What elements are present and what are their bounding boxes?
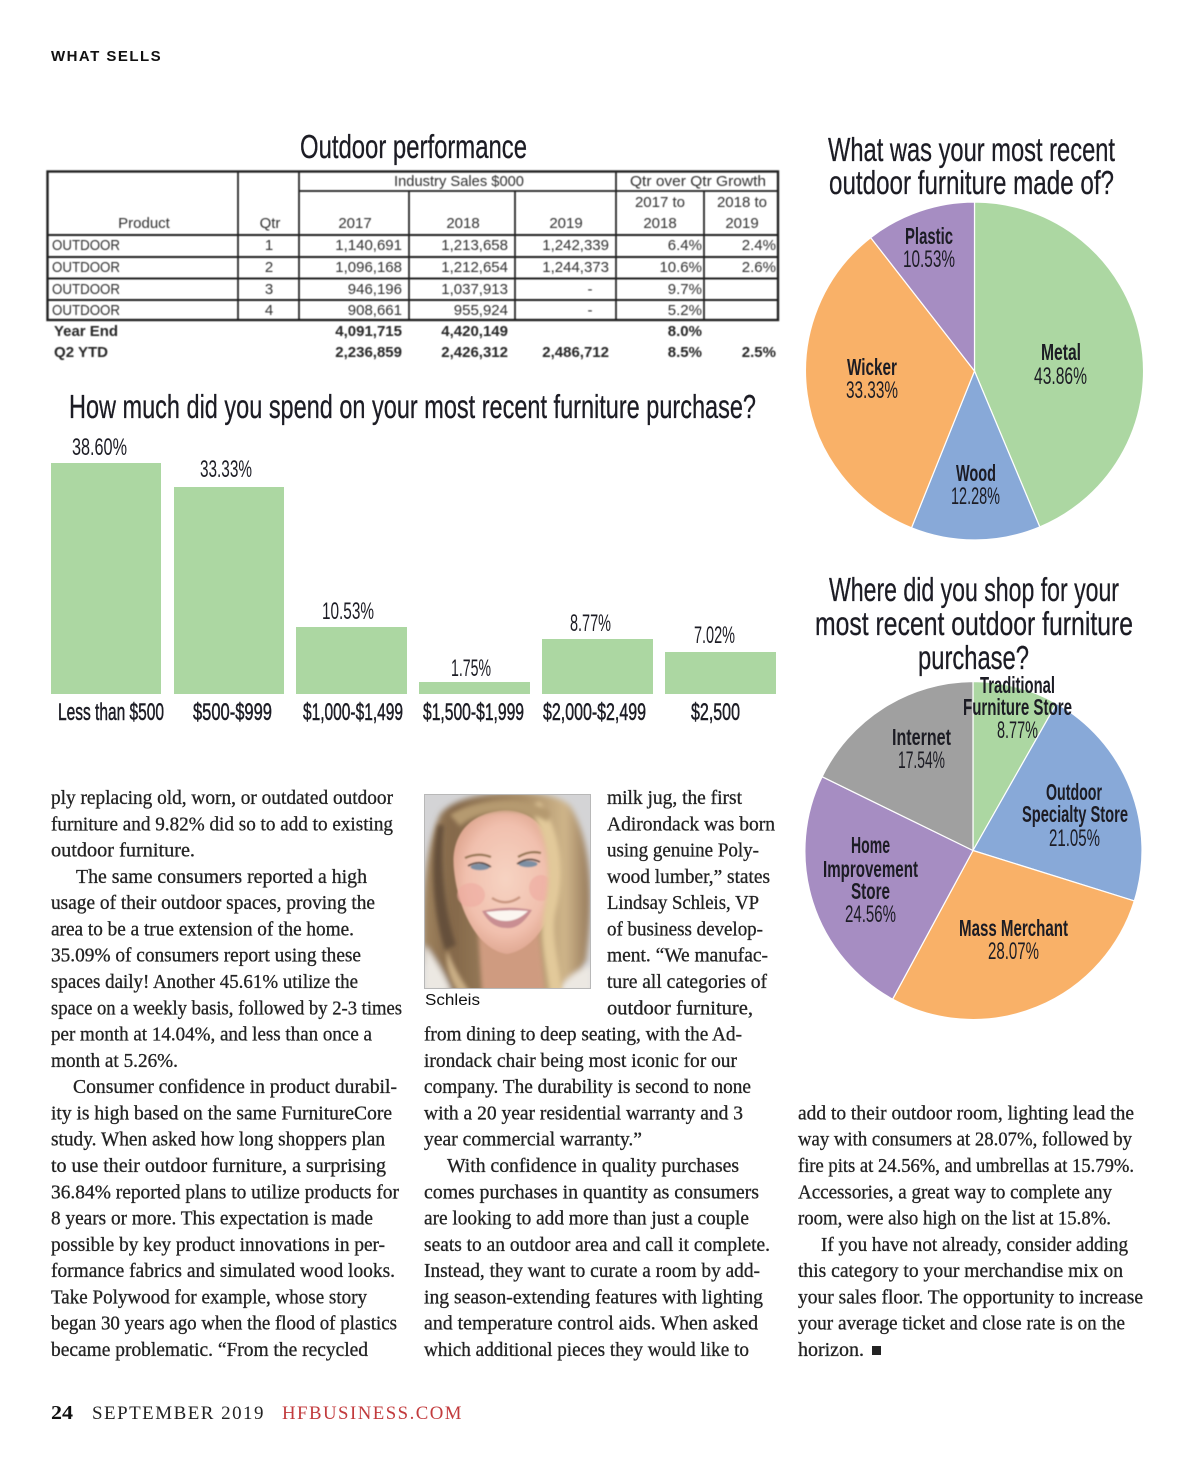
text column 1: usage of their outdoor spaces, proving the xyxy=(51,892,375,914)
label: home improvement store: Home xyxy=(851,832,890,858)
text column 2: Adirondack was born xyxy=(607,813,775,835)
bar: less than $500 xyxy=(51,434,164,726)
heading: outdoor performance: Outdoor performance xyxy=(300,128,527,165)
sales table: 2019 xyxy=(549,215,583,232)
sales table: 2 xyxy=(265,259,273,276)
text column 1: Consumer confidence in product durabil- xyxy=(73,1076,397,1098)
text column 1: outdoor furniture. xyxy=(51,840,195,862)
sales table: 1,213,658 xyxy=(441,237,508,254)
text column 2: Lindsay Schleis, VP xyxy=(607,892,759,914)
text column 3: Accessories, a great way to complete any xyxy=(798,1181,1112,1203)
text column 2: and temperature control aids. When asked xyxy=(424,1313,758,1335)
sales table: OUTDOOR xyxy=(52,237,120,254)
sales table: 908,661 xyxy=(348,302,402,319)
text column 1 xyxy=(51,787,402,1361)
label: internet: 17.54% xyxy=(898,747,945,774)
text column 3: horizon. xyxy=(798,1339,864,1361)
bar: $1,500-$1,999: $1,500-$1,999 xyxy=(423,699,524,726)
text column 1: formance fabrics and simulated wood looks. xyxy=(51,1260,395,1282)
sales table: 2.5% xyxy=(742,344,776,361)
text column 3: room, were also high on the list at 15.8%. xyxy=(798,1208,1111,1230)
bar: $1,000-$1,499 xyxy=(296,598,407,726)
bar: less than $500: Less than $500 xyxy=(58,699,164,726)
photo: portrait of Lindsay Schleis xyxy=(423,792,592,995)
text column 2: Instead, they want to curate a room by add- xyxy=(424,1260,760,1282)
sales table: Year End xyxy=(54,323,118,340)
label: outdoor specialty store xyxy=(1022,779,1128,852)
text column 1: area to be a true extension of the home. xyxy=(51,918,354,940)
bar: $1,500-$1,999 xyxy=(419,655,530,726)
panel: spending bar chart xyxy=(51,388,776,726)
sales table: OUTDOOR xyxy=(52,259,120,276)
label: home improvement store: Store xyxy=(851,878,890,904)
sales table: Qtr over Qtr Growth xyxy=(630,173,766,190)
sales table: 1,212,654 xyxy=(441,259,508,276)
text column 1: furniture and 9.82% did so to add to existing xyxy=(51,813,393,835)
text column 2: ing season-extending features with lighting xyxy=(424,1286,763,1308)
text column 2: ture all categories of xyxy=(607,971,767,993)
sales table: 3 xyxy=(265,281,273,298)
text column 2: outdoor furniture, xyxy=(607,997,753,1019)
text column 2: year commercial warranty.” xyxy=(424,1129,642,1151)
label: outdoor specialty store: Outdoor xyxy=(1046,779,1102,805)
sales table: 6.4% xyxy=(668,237,702,254)
text column 1: possible by key product innovations in per- xyxy=(51,1234,385,1256)
bar: $1,000-$1,499: 10.53% xyxy=(322,598,374,625)
sales table: 2019 xyxy=(725,215,759,232)
footer: folio xyxy=(51,1402,463,1424)
text column 1: study. When asked how long shoppers plan xyxy=(51,1129,385,1151)
text column 1: ply replacing old, worn, or outdated outdoor xyxy=(51,787,393,809)
pie chart: retailers xyxy=(805,681,1142,1020)
label: metal xyxy=(1034,339,1087,390)
pie chart: materials xyxy=(805,202,1144,540)
sales table: 1 xyxy=(265,237,273,254)
sales table: 2018 xyxy=(446,215,480,232)
text column 3: add to their outdoor room, lighting lead the xyxy=(798,1102,1134,1124)
text column 2: With confidence in quality purchases xyxy=(447,1155,739,1177)
panel: furniture material pie chart xyxy=(805,131,1144,540)
panel: where shoppers bought pie chart xyxy=(805,571,1142,1020)
heading: where did you shop: purchase? xyxy=(918,639,1029,676)
text column 2: with a 20 year residential warranty and 3 xyxy=(424,1102,743,1124)
text column 2: which additional pieces they would like to xyxy=(424,1339,749,1361)
text column 1: became problematic. “From the recycled xyxy=(51,1339,368,1361)
label: home improvement store: Improvement xyxy=(823,856,918,882)
bar: $2,500: $2,500 xyxy=(691,699,740,726)
label: home improvement store xyxy=(823,832,918,928)
sales table: 8.0% xyxy=(668,323,702,340)
text column 2: milk jug, the first xyxy=(607,787,742,809)
text column 1: space on a weekly basis, followed by 2-3 times xyxy=(51,997,402,1019)
text column 1: ity is high based on the same FurnitureCore xyxy=(51,1102,392,1124)
sales table: 1,140,691 xyxy=(335,237,402,254)
bar: less than $500: 38.60% xyxy=(72,434,127,461)
sales table: 946,196 xyxy=(348,281,402,298)
sales table xyxy=(47,171,778,361)
text column 3 xyxy=(798,1102,1143,1361)
sales table: 2,486,712 xyxy=(542,344,609,361)
sales table: OUTDOOR xyxy=(52,302,120,319)
text column 2: company. The durability is second to none xyxy=(424,1076,751,1098)
label: mass merchant xyxy=(959,915,1068,965)
label: wicker: 33.33% xyxy=(846,377,898,404)
text column 2 xyxy=(424,787,775,1361)
bar: $500-$999 xyxy=(174,456,284,726)
bar: $1,000-$1,499: $1,000-$1,499 xyxy=(303,699,403,726)
text column 2: wood lumber,” states xyxy=(607,866,770,888)
bar: $500-$999: $500-$999 xyxy=(193,699,272,726)
text column 2: of business develop- xyxy=(607,918,763,940)
text column 1: spaces daily! Another 45.61% utilize the xyxy=(51,971,358,993)
text column 1: 8 years or more. This expectation is made xyxy=(51,1208,373,1230)
text column 2: ment. “We manufac- xyxy=(607,945,768,967)
footer: folio: SEPTEMBER 2019 xyxy=(92,1403,265,1424)
sales table: 5.2% xyxy=(668,302,702,319)
bar: $1,500-$1,999: 1.75% xyxy=(451,655,491,682)
sales table: 2018 to xyxy=(717,194,767,211)
sales table: 2017 to xyxy=(635,194,685,211)
sales table: 2,426,312 xyxy=(441,344,508,361)
text column 1: to use their outdoor furniture, a surprising xyxy=(51,1155,386,1177)
footer: folio: 24 xyxy=(51,1402,73,1424)
text column 3: your sales floor. The opportunity to increase xyxy=(798,1286,1143,1308)
bar: $2,000-$2,499: 8.77% xyxy=(570,610,611,637)
sales table: - xyxy=(588,281,592,298)
text column 2: from dining to deep seating, with the Ad- xyxy=(424,1024,742,1046)
sales table: Qtr xyxy=(260,215,280,232)
label: plastic xyxy=(903,223,955,273)
label: wicker xyxy=(846,354,898,404)
bar: $2,000-$2,499 xyxy=(542,610,653,726)
text column 3: this category to your merchandise mix on xyxy=(798,1260,1123,1282)
label: wicker: Wicker xyxy=(847,354,897,380)
bar: $2,500: 7.02% xyxy=(694,622,735,649)
label: metal: Metal xyxy=(1041,339,1081,365)
bar: $500-$999: 33.33% xyxy=(200,456,252,483)
section label: what sells: WHAT SELLS xyxy=(51,48,162,65)
text column 2: comes purchases in quantity as consumers xyxy=(424,1181,759,1203)
sales table: 2017 xyxy=(338,215,372,232)
sales table: OUTDOOR xyxy=(52,281,120,298)
footer: folio: HFBUSINESS.COM xyxy=(282,1403,463,1424)
sales table: 2018 xyxy=(643,215,677,232)
sales table: Industry Sales $000 xyxy=(394,173,524,190)
label: traditional furniture store: 8.77% xyxy=(997,717,1038,744)
sales table: 8.5% xyxy=(668,344,702,361)
sales table: 2.4% xyxy=(742,237,776,254)
panel: outdoor performance table xyxy=(47,128,778,361)
sales table: 2.6% xyxy=(742,259,776,276)
label: outdoor specialty store: 21.05% xyxy=(1049,825,1100,852)
text column 1: began 30 years ago when the flood of plastics xyxy=(51,1313,397,1335)
label: metal: 43.86% xyxy=(1034,363,1087,390)
label: wood: 12.28% xyxy=(951,483,1000,510)
label: plastic: Plastic xyxy=(905,223,953,249)
text column 2: are looking to add more than just a couple xyxy=(424,1208,749,1230)
text column 1: per month at 14.04%, and less than once a xyxy=(51,1024,372,1046)
sales table: 1,096,168 xyxy=(335,259,402,276)
label: outdoor specialty store: Specialty Store xyxy=(1022,801,1128,827)
text column 2: using genuine Poly- xyxy=(607,840,759,862)
heading: what was your most recent outdoor furniture made of xyxy=(828,131,1115,201)
label: traditional furniture store xyxy=(963,672,1072,744)
label: internet xyxy=(892,724,951,774)
text column 2: irondack chair being most iconic for our xyxy=(424,1050,737,1072)
label: traditional furniture store: Furniture Store xyxy=(963,694,1072,720)
sales table: 9.7% xyxy=(668,281,702,298)
label: wood: Wood xyxy=(956,460,996,486)
text column 1: month at 5.26%. xyxy=(51,1050,178,1072)
heading: how much did you spend: How much did you spend on your most recent furniture purchase? xyxy=(69,388,756,425)
sales table: 1,244,373 xyxy=(542,259,609,276)
sales table: Q2 YTD xyxy=(54,344,108,361)
caption: Schleis: Schleis xyxy=(425,992,480,1009)
text column 1: The same consumers reported a high xyxy=(76,866,367,888)
text column 3: If you have not already, consider adding xyxy=(821,1234,1128,1256)
bar: $2,000-$2,499: $2,000-$2,499 xyxy=(543,699,646,726)
label: mass merchant: Mass Merchant xyxy=(959,915,1068,941)
sales table: 10.6% xyxy=(659,259,702,276)
label: internet: Internet xyxy=(892,724,951,750)
sales table: 4,091,715 xyxy=(335,323,402,340)
sales table: Product xyxy=(118,215,171,232)
sales table: 1,242,339 xyxy=(542,237,609,254)
text column 1: 35.09% of consumers report using these xyxy=(51,945,361,967)
label: wood xyxy=(951,460,1000,510)
sales table: 955,924 xyxy=(454,302,508,319)
sales table: 2,236,859 xyxy=(335,344,402,361)
label: home improvement store: 24.56% xyxy=(845,901,896,928)
text column 3: fire pits at 24.56%, and umbrellas at 15.79%. xyxy=(798,1155,1134,1177)
sales table: 1,037,913 xyxy=(441,281,508,298)
label: traditional furniture store: Traditional xyxy=(980,672,1055,698)
label: mass merchant: 28.07% xyxy=(988,938,1039,965)
text column 3: your average ticket and close rate is on the xyxy=(798,1313,1125,1335)
sales table: 4 xyxy=(265,302,273,319)
text column 2: seats to an outdoor area and call it complete. xyxy=(424,1234,770,1256)
label: plastic: 10.53% xyxy=(903,246,955,273)
text column 1: 36.84% reported plans to utilize products for xyxy=(51,1181,399,1203)
bar: $2,500 xyxy=(665,622,776,726)
text column 3: way with consumers at 28.07%, followed by xyxy=(798,1129,1132,1151)
text column 1: Take Polywood for example, whose story xyxy=(51,1286,367,1308)
sales table: 4,420,149 xyxy=(441,323,508,340)
sales table: - xyxy=(588,302,592,319)
heading: where did you shop xyxy=(815,571,1133,676)
